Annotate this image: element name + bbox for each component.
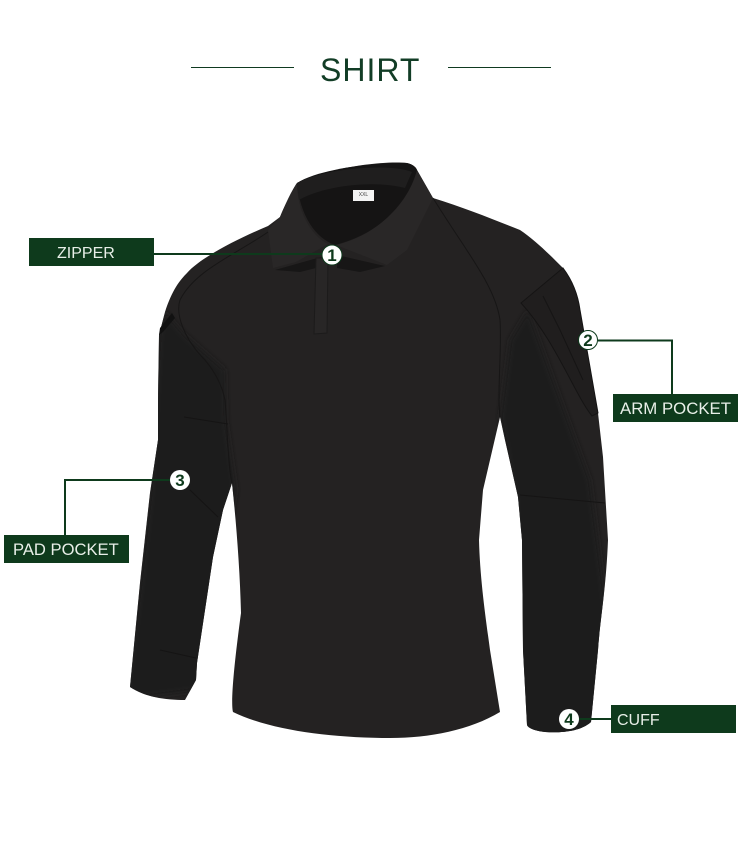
shirt silhouette (130, 162, 608, 738)
leader line: cuff (578, 718, 611, 720)
label box: zipper (29, 238, 154, 266)
number marker 2 (578, 330, 598, 350)
neck interior (297, 163, 417, 245)
callout 3: pad pocket: PAD POCKET (13, 540, 119, 559)
size label: XXL (359, 192, 368, 198)
callout 2: arm pocket: ARM POCKET (620, 399, 731, 418)
collar right flap (336, 170, 433, 265)
arm pocket (521, 268, 598, 416)
callout 4: cuff: CUFF (617, 712, 660, 729)
raglan seams (179, 198, 500, 483)
number marker 3: 3 (175, 471, 185, 490)
number marker 1: 1 (327, 246, 337, 265)
number marker 1 (322, 245, 342, 265)
shirt illustration (125, 162, 612, 740)
collar left flap (268, 183, 328, 268)
collar shadow (275, 255, 385, 272)
sleeve shading (125, 310, 612, 740)
left arm pocket tip (159, 313, 175, 335)
label box: cuff (611, 705, 736, 733)
number marker 4 (559, 709, 579, 729)
leader line: zipper (154, 253, 326, 255)
number marker 2: 2 (583, 331, 593, 350)
elbow and pad seams (160, 417, 605, 658)
number marker 3 (170, 470, 190, 490)
leader line: pad pocket (65, 480, 172, 535)
label box: arm pocket (613, 394, 738, 422)
zipper placket (314, 258, 328, 334)
size label (353, 190, 374, 201)
leader line: arm pocket (598, 340, 672, 394)
callout 4: cuff (559, 705, 736, 733)
callout 2: arm pocket (578, 330, 738, 422)
title: SHIRT: SHIRT (320, 52, 420, 88)
callout 1: zipper: ZIPPER (57, 245, 115, 262)
callout 3: pad pocket (4, 470, 190, 563)
callout 1: zipper (29, 238, 342, 266)
label box: pad pocket (4, 535, 129, 563)
number marker 4: 4 (564, 710, 574, 729)
